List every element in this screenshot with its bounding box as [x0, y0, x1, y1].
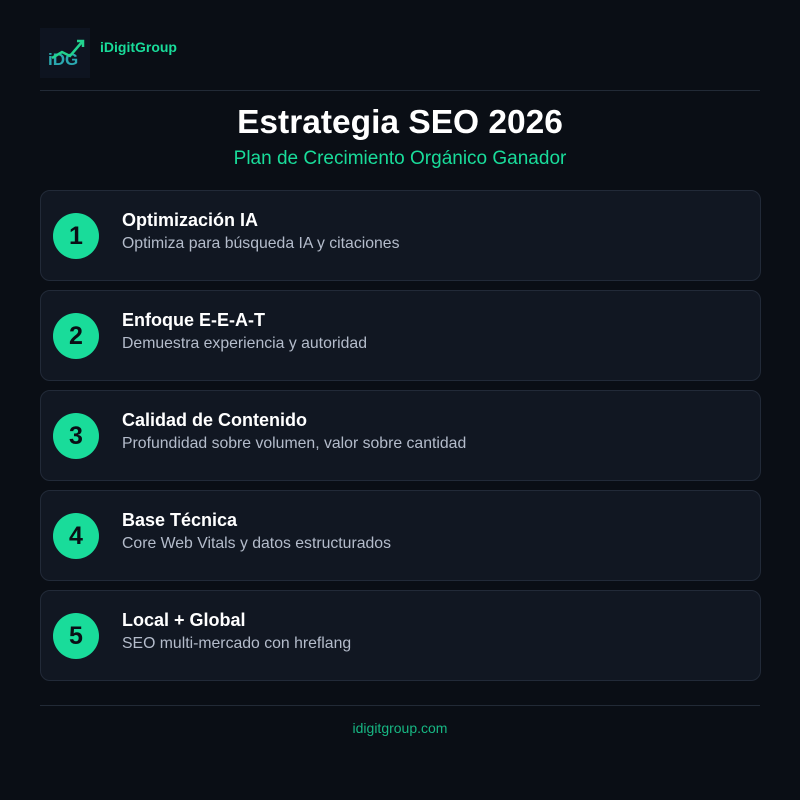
card 2: Enfoque E-E-A-T — [122, 310, 265, 330]
card 3: 3 — [69, 422, 83, 450]
card 5: SEO multi-mercado con hreflang — [122, 635, 351, 652]
footer: idigitgroup.com — [353, 720, 447, 736]
card 1 — [40, 190, 761, 281]
card 2 — [40, 290, 761, 381]
brand name: iDigitGroup — [100, 39, 177, 55]
card 1: Optimiza para búsqueda IA y citaciones — [122, 235, 399, 252]
card 2: 2 — [69, 322, 83, 350]
card 3: Profundidad sobre volumen, valor sobre cantidad — [122, 435, 466, 452]
card 4 — [40, 490, 761, 581]
subtitle: Plan de Crecimiento Orgánico Ganador — [234, 148, 566, 169]
card 4: Base Técnica — [122, 510, 237, 530]
card 1: 1 — [69, 222, 83, 250]
title: Estrategia SEO 2026 — [237, 104, 563, 141]
card 4: Core Web Vitals y datos estructurados — [122, 535, 391, 552]
card 1: Optimización IA — [122, 210, 258, 230]
card 3: Calidad de Contenido — [122, 410, 307, 430]
card 3 — [40, 390, 761, 481]
card 4: 4 — [69, 522, 83, 550]
card 5: Local + Global — [122, 610, 246, 630]
card 5: 5 — [69, 622, 83, 650]
card 2: Demuestra experiencia y autoridad — [122, 335, 367, 352]
logo — [40, 28, 90, 78]
logo: iDG — [48, 50, 78, 69]
card 5 — [40, 590, 761, 681]
